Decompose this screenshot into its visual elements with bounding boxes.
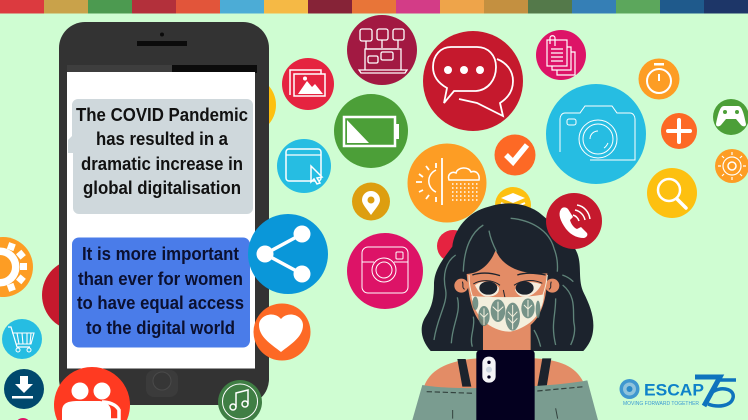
- message bubble: grey: dramatic increase in: [81, 154, 243, 174]
- icon: stopwatch: [638, 58, 680, 100]
- icon: phone call: [546, 193, 602, 249]
- message bubble: grey: The COVID Pandemic: [76, 105, 248, 125]
- icon: game controller: [713, 99, 748, 135]
- icon: people group: [54, 367, 130, 420]
- ESCAP 75 logo: MOVING FORWARD TOGETHER: [623, 401, 699, 407]
- message bubble: grey: global digitalisation: [83, 178, 241, 198]
- woman with mask and phone: [412, 203, 598, 420]
- icon: yellow circle behind phone: [218, 76, 276, 134]
- icon: weather: [408, 144, 486, 222]
- message bubble: blue: to the digital world: [86, 318, 235, 338]
- icon: sun settings: [715, 149, 748, 183]
- icon: layers: [495, 187, 531, 223]
- icon: red circle behind hair: [437, 230, 469, 262]
- icon: pink circle at lower edge: [18, 418, 28, 420]
- phone held by woman: [476, 350, 535, 420]
- icon: chat bubbles: [423, 31, 523, 131]
- ear detail and brows: [462, 282, 551, 289]
- eyes: [475, 282, 499, 297]
- icon: documents: [536, 30, 586, 80]
- icon: browser cursor: [277, 139, 331, 193]
- top colour bar: [0, 0, 748, 14]
- icon: music note: [218, 380, 262, 420]
- icon: gear: [0, 237, 33, 297]
- message bubble: blue: It is more important: [82, 244, 239, 264]
- smartphone: [59, 22, 269, 405]
- UN emblem: [620, 379, 640, 399]
- top: [412, 380, 598, 420]
- straps: [457, 358, 551, 387]
- message bubble: grey: has resulted in a: [96, 129, 229, 149]
- message bubble: blue: to have equal access: [77, 293, 244, 313]
- message bubble: blue: than ever for women: [78, 269, 243, 289]
- icon: location pin: [352, 182, 390, 220]
- skin: neck, face and ears: [467, 250, 547, 350]
- icon: heart: [254, 304, 310, 360]
- hair strands: [434, 218, 575, 347]
- icon: share: [248, 214, 328, 294]
- icon: instagram: [347, 233, 423, 309]
- icon: red circle behind phone: [42, 259, 114, 331]
- shoulders: [424, 358, 585, 397]
- icon: plus: [661, 113, 697, 149]
- icon: pictures: [282, 58, 334, 110]
- icon: magnifier: [647, 168, 697, 218]
- icon: shopping cart: [2, 319, 42, 359]
- ESCAP 75 logo: [620, 377, 736, 407]
- icon: check mark: [494, 134, 536, 176]
- icon: download: [4, 369, 44, 409]
- message bubble: grey: [68, 99, 253, 214]
- message bubble: blue: [72, 238, 250, 348]
- icon: battery: [334, 94, 408, 168]
- 75 mark: [695, 377, 736, 406]
- icon: social media laptop: [347, 15, 417, 85]
- mask leaf pattern: [472, 297, 540, 331]
- mask: [471, 294, 544, 332]
- hair: [422, 203, 593, 351]
- icon: camera: [546, 84, 646, 184]
- ESCAP 75 logo: ESCAP: [644, 380, 704, 400]
